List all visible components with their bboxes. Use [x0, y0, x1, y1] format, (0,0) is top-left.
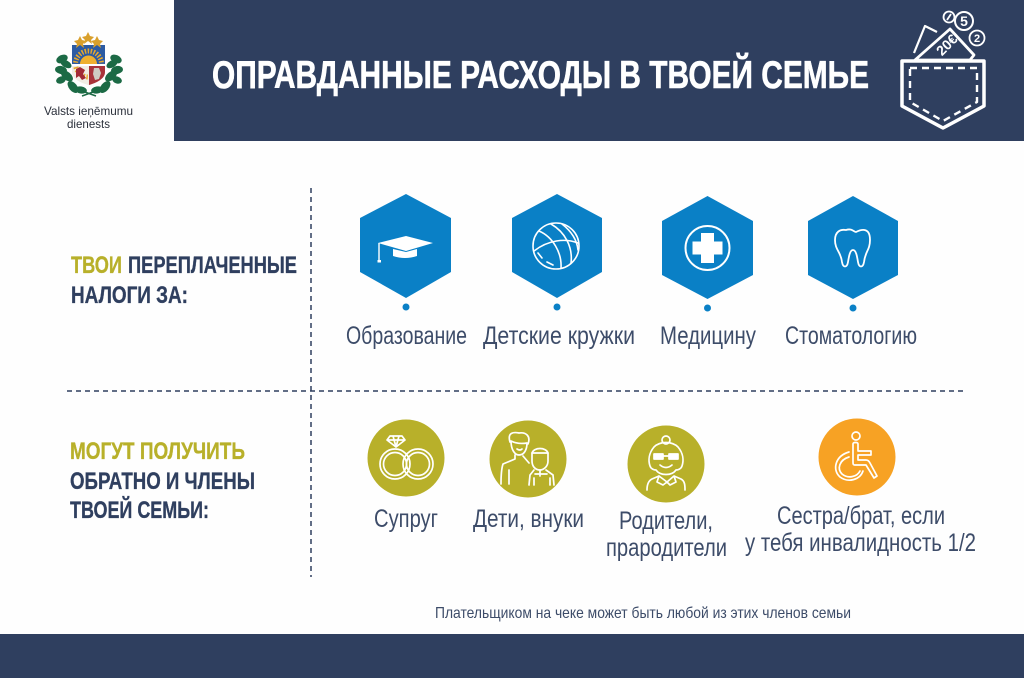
icon: pocket with money: 20€	[933, 31, 961, 59]
logo: Valsts ienemumu dienests: dienests	[67, 117, 110, 131]
icon: disability circle	[818, 418, 896, 496]
footer band	[0, 634, 1024, 678]
label: dentistry: Стоматологию	[785, 322, 917, 350]
label: education: Образование	[346, 322, 467, 350]
heading: overpaid taxes	[71, 252, 297, 309]
label: parents, grandparents: прародители	[606, 534, 727, 562]
label: parents, grandparents: Родители,	[619, 507, 713, 535]
icon: three stars	[74, 32, 103, 48]
icon: parents and grandparents circle	[628, 426, 704, 502]
icon: pocket with money: 5	[960, 13, 968, 29]
heading: overpaid taxes: НАЛОГИ ЗА:	[71, 282, 188, 309]
icon: children and grandchildren circle	[490, 420, 566, 498]
label: sister or brother: Сестра/брат, если	[777, 502, 945, 530]
icon: education hexagon	[360, 194, 451, 310]
icon: spouse rings circle	[368, 420, 444, 496]
heading: family can get back	[70, 438, 255, 524]
heading: family can get back: ТВОЕЙ СЕМЬИ:	[70, 496, 209, 524]
label: spouse: Супруг	[374, 505, 438, 533]
label: sister or brother: у тебя инвалидность 1/2	[745, 529, 976, 557]
label: children's clubs: Детские кружки	[483, 322, 635, 350]
heading: family can get back: МОГУТ ПОЛУЧИТЬ	[70, 438, 245, 465]
footnote: Плательщиком на чеке может быть любой из этих членов семьи	[435, 605, 851, 622]
icon: basketball hexagon	[512, 194, 602, 310]
heading: overpaid taxes: ПЕРЕПЛАЧЕННЫЕ	[128, 252, 297, 279]
icon: medicine hexagon	[662, 196, 753, 312]
label: sister or brother	[745, 502, 976, 557]
icon: dentistry hexagon	[808, 196, 898, 312]
label: parents, grandparents	[606, 507, 727, 562]
icon: pocket with money: 2	[974, 33, 980, 45]
label: children, grandchildren: Дети, внуки	[473, 505, 584, 533]
horizontal dashed divider	[67, 390, 965, 392]
label: medicine: Медицину	[660, 322, 756, 350]
logo: Valsts ienemumu dienests	[44, 32, 133, 131]
vertical dashed divider	[310, 188, 312, 577]
icon: pocket with money	[902, 12, 984, 128]
logo text: Valsts ieņēmumu	[44, 104, 133, 118]
heading: overpaid taxes: ТВОИ	[71, 252, 122, 279]
heading: family can get back: ОБРАТНО И ЧЛЕНЫ	[70, 468, 255, 495]
icon: shield	[72, 45, 105, 85]
icon: oak wreath	[54, 53, 124, 96]
header banner	[174, 0, 1024, 141]
